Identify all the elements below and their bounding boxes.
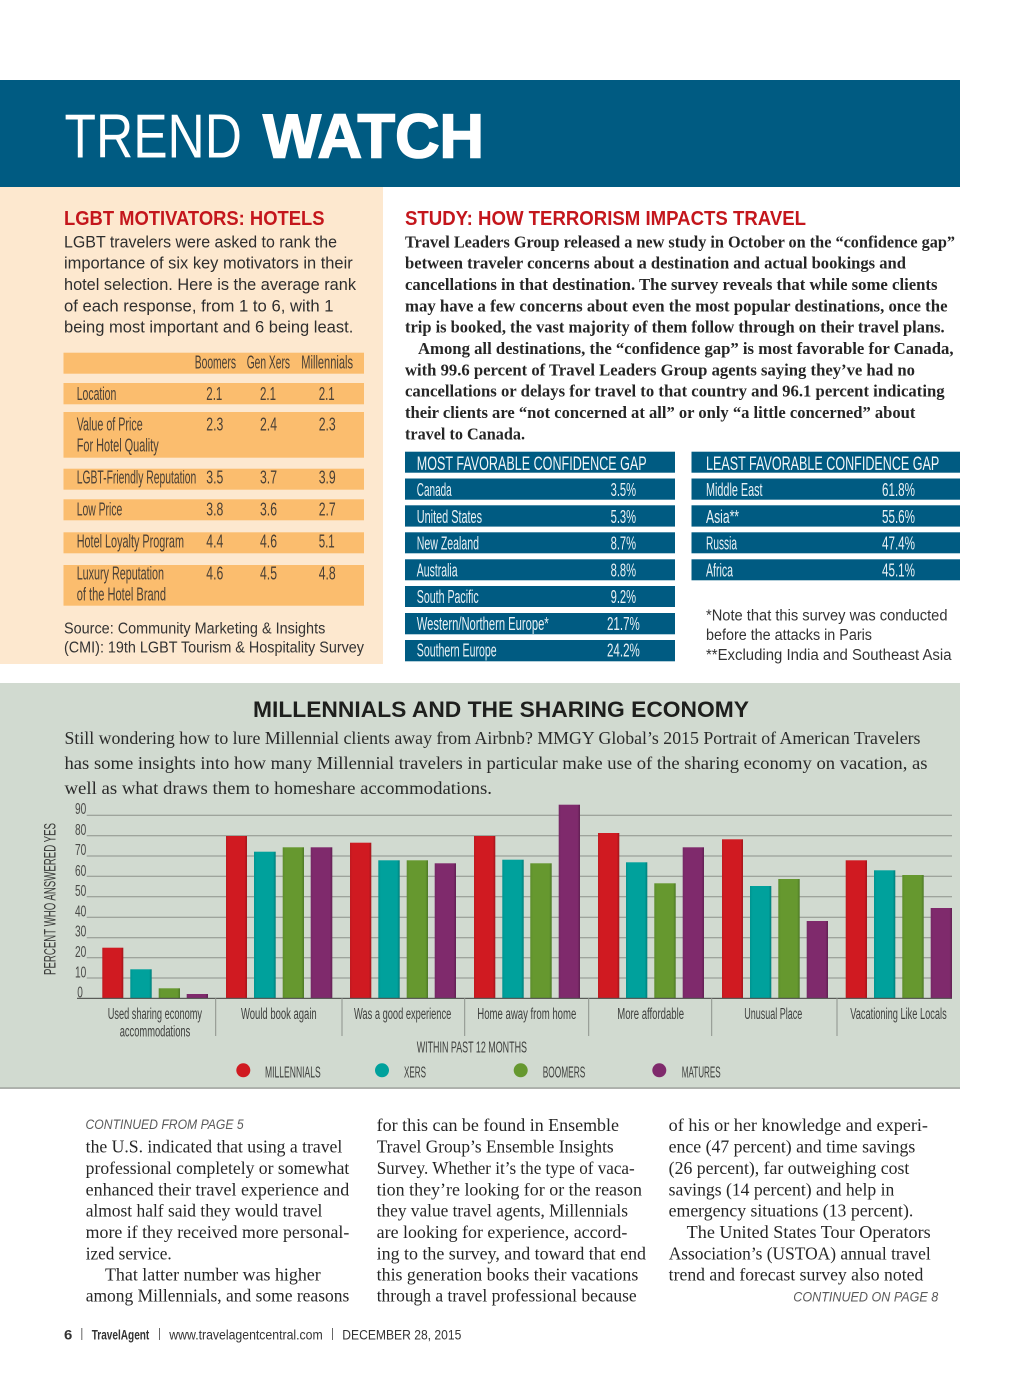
legend: XERS xyxy=(404,1064,426,1081)
y axis labels: 30 xyxy=(75,924,86,941)
row: South Pacific: 9.2% xyxy=(611,587,636,607)
row: Middle East xyxy=(692,478,960,500)
footnotes xyxy=(706,608,952,664)
row: Location: 2.1 xyxy=(206,384,222,404)
row: LGBT-Friendly Reputation: 3.9 xyxy=(319,467,336,487)
panel: terrorism study xyxy=(405,207,960,664)
article column 1: professional completely or somewhat xyxy=(86,1158,349,1178)
intro text: Millennials: has some insights into how many Millennial travelers in particular make use of the sharing economy on vacation, as xyxy=(64,753,928,773)
article column 3: Association’s (USTOA) annual travel xyxy=(669,1243,931,1263)
heading: Millennials: MILLENNIALS AND THE SHARING ECONOMY xyxy=(253,697,749,722)
table title: most favorable: MOST FAVORABLE CONFIDENCE GAP xyxy=(417,453,647,475)
article column 2: tion they’re looking for or the reason xyxy=(377,1179,642,1199)
table header row: Millennials xyxy=(301,352,353,372)
x axis caption: WITHIN PAST 12 MONTHS xyxy=(417,1040,527,1057)
row: Canada: 3.5% xyxy=(611,480,636,500)
row: Russia: Russia xyxy=(706,534,738,554)
continued on note: CONTINUED ON PAGE 8 xyxy=(793,1290,939,1305)
y axis title: PERCENT WHO ANSWERED YES xyxy=(40,823,60,975)
row: Hotel Loyalty Program: 5.1 xyxy=(319,531,335,551)
row: Luxury Reputation: 4.8 xyxy=(319,563,336,583)
x axis labels: Home away from home xyxy=(477,1006,576,1023)
body text: terrorism study: cancellations in that destination. The survey reveals that while some clients xyxy=(405,275,938,294)
row: Africa xyxy=(692,559,960,580)
table: least favorable confidence gap xyxy=(692,452,960,580)
row: Value of Price: Value of Price xyxy=(77,415,143,435)
row: LGBT-Friendly Reputation xyxy=(64,467,364,490)
page footer: www.travelagentcentral.com xyxy=(168,1327,323,1342)
title: TREND: TREND xyxy=(64,102,242,172)
y axis labels: 20 xyxy=(75,944,86,961)
row: Luxury Reputation xyxy=(64,563,364,606)
row: South Pacific xyxy=(405,586,675,607)
footnotes: before the attacks in Paris xyxy=(706,627,872,644)
article column 2 xyxy=(377,1115,646,1306)
article column 1: more if they received more personal- xyxy=(86,1222,349,1242)
source note: (CMI): 19th LGBT Tourism & Hospitality Survey xyxy=(64,640,364,657)
row: Low Price: Low Price xyxy=(77,499,122,519)
row: South Pacific: South Pacific xyxy=(417,587,479,607)
article column 3: of his or her knowledge and experi- xyxy=(669,1115,928,1135)
intro text: LGBT motivators xyxy=(64,232,356,337)
row: Africa: 45.1% xyxy=(882,560,915,580)
article column 1: That latter number was higher xyxy=(105,1264,321,1284)
article column 2: are looking for experience, accord- xyxy=(377,1222,627,1242)
intro text: LGBT motivators: importance of six key motivators in their xyxy=(64,254,353,273)
page footer xyxy=(64,1327,461,1342)
article column 1 xyxy=(86,1117,350,1306)
legend: MILLENNIALS xyxy=(265,1064,321,1081)
row: New Zealand: 8.7% xyxy=(611,534,636,554)
row: Hotel Loyalty Program: Hotel Loyalty Program xyxy=(77,531,184,551)
row: Asia: Asia** xyxy=(706,507,739,527)
row: Australia: 8.8% xyxy=(611,560,636,580)
body text: terrorism study: may have a few concerns about even the most popular destinations, once the xyxy=(405,296,948,315)
bars: used sharing economy xyxy=(102,948,208,998)
intro text: Millennials: Still wondering how to lure Millennial clients away from Airbnb? MMGY Global’s 2015 Portrait of American Travelers xyxy=(64,728,920,748)
body text: terrorism study: between traveler concerns about a destination and actual bookings and xyxy=(405,254,906,273)
row: Value of Price xyxy=(64,412,364,458)
x axis labels: accommodations xyxy=(120,1024,190,1041)
article column 2: ing to the survey, and toward that end xyxy=(377,1243,646,1263)
row: United States: 5.3% xyxy=(611,507,636,527)
source note xyxy=(64,620,364,657)
row: LGBT-Friendly Reputation: 3.7 xyxy=(260,467,277,487)
legend xyxy=(236,1063,721,1081)
heading: terrorism study: STUDY: HOW TERRORISM IMPACTS TRAVEL xyxy=(405,207,806,230)
x axis labels: Was a good experience xyxy=(354,1006,451,1023)
legend: MATURES xyxy=(682,1064,721,1081)
article column 1: ized service. xyxy=(86,1243,172,1263)
y axis labels: 10 xyxy=(75,964,86,981)
row: Value of Price: For Hotel Quality xyxy=(77,436,159,456)
article column 3: emergency situations (13 percent). xyxy=(669,1201,913,1221)
table header row: Boomers xyxy=(195,352,236,372)
row: Luxury Reputation: Luxury Reputation xyxy=(77,563,164,583)
x axis labels: Used sharing economy xyxy=(108,1006,202,1023)
row: Canada xyxy=(405,478,675,500)
intro text: LGBT motivators: LGBT travelers were asked to rank the xyxy=(64,232,337,251)
page footer: TravelAgent xyxy=(92,1327,150,1342)
body text: terrorism study: their clients are “not concerned at all” or only “a little concerned” about xyxy=(405,403,916,422)
article column 1: among Millennials, and some reasons xyxy=(86,1286,349,1306)
row: Luxury Reputation: 4.5 xyxy=(260,563,277,583)
row: Russia xyxy=(692,532,960,554)
continued from note: CONTINUED FROM PAGE 5 xyxy=(86,1117,244,1132)
row: New Zealand: New Zealand xyxy=(417,534,479,554)
article column 2: through a travel professional because xyxy=(377,1286,637,1306)
article column 3: savings (14 percent) and help in xyxy=(669,1179,895,1199)
row: Location xyxy=(64,383,364,404)
row: LGBT-Friendly Reputation: 3.5 xyxy=(206,467,223,487)
row: Russia: 47.4% xyxy=(882,534,915,554)
body text: terrorism study: Travel Leaders Group released a new study in October on the “confidence gap” xyxy=(405,232,955,251)
footnotes: **Excluding India and Southeast Asia xyxy=(706,647,952,664)
row: Asia xyxy=(692,505,960,527)
row: Middle East: Middle East xyxy=(706,480,762,500)
row: Low Price: 3.6 xyxy=(260,499,277,519)
row: Hotel Loyalty Program: 4.4 xyxy=(206,531,223,551)
y axis labels: 40 xyxy=(75,904,86,921)
intro text: LGBT motivators: being most important and 6 being least. xyxy=(64,318,353,337)
bars: home away from home xyxy=(474,805,580,998)
row: Southern Europe: 24.2% xyxy=(607,641,640,661)
row: Luxury Reputation: 4.6 xyxy=(206,563,223,583)
row: Value of Price: 2.3 xyxy=(319,415,336,435)
source note: Source: Community Marketing & Insights xyxy=(64,620,326,637)
header banner: Trend Watch xyxy=(0,80,960,187)
body text: terrorism study: Among all destinations, the “confidence gap” is most favorable for Canada, xyxy=(418,339,954,358)
body text: terrorism study xyxy=(405,232,955,443)
row: Africa: Africa xyxy=(706,560,734,580)
x axis labels: More affordable xyxy=(617,1006,684,1023)
y axis labels: 70 xyxy=(75,842,86,859)
article column 1: the U.S. indicated that using a travel xyxy=(86,1137,342,1157)
article column 3 xyxy=(669,1115,939,1305)
row: Western/Northern Europe: 21.7% xyxy=(607,614,640,634)
bars: was a good experience xyxy=(350,843,456,998)
table: motivator rankings xyxy=(64,352,364,606)
row: Australia xyxy=(405,559,675,580)
row: Low Price: 3.8 xyxy=(206,499,223,519)
row: Hotel Loyalty Program: 4.6 xyxy=(260,531,277,551)
bars: more affordable xyxy=(598,833,704,998)
row: Hotel Loyalty Program xyxy=(64,531,364,553)
body text: terrorism study: with 99.6 percent of Travel Leaders Group agents saying they’ve had no xyxy=(405,360,915,379)
row: Value of Price: 2.4 xyxy=(260,415,277,435)
row: Australia: Australia xyxy=(417,560,458,580)
intro text: LGBT motivators: of each response, from 1 to 6, with 1 xyxy=(64,296,334,316)
row: Location: 2.1 xyxy=(319,384,335,404)
page footer: 6 xyxy=(64,1327,73,1342)
legend: BOOMERS xyxy=(543,1064,585,1081)
panel: Millennials and the sharing economy xyxy=(0,683,960,1089)
row: Middle East: 61.8% xyxy=(882,480,915,500)
body text: terrorism study: travel to Canada. xyxy=(405,424,525,443)
x axis labels: Vacationing Like Locals xyxy=(850,1006,947,1023)
article column 3: The United States Tour Operators xyxy=(687,1222,931,1242)
title: WATCH: WATCH xyxy=(263,102,484,172)
row: United States xyxy=(405,505,675,527)
article column 2: they value travel agents, Millennials xyxy=(377,1201,628,1221)
bars: vacationing like locals xyxy=(846,860,952,998)
intro text: Millennials: well as what draws them to homeshare accommodations. xyxy=(64,778,492,798)
footnotes: *Note that this survey was conducted xyxy=(706,608,948,625)
y axis labels: 0 xyxy=(77,985,83,1002)
row: Location: 2.1 xyxy=(260,384,276,404)
body text: terrorism study: cancellations or delays for travel to that country and 96.1 percent indicating xyxy=(405,382,945,401)
x axis labels: Unusual Place xyxy=(744,1006,802,1023)
x axis labels xyxy=(108,1006,947,1041)
article column 2: Travel Group’s Ensemble Insights xyxy=(377,1137,614,1157)
page footer: DECEMBER 28, 2015 xyxy=(342,1327,461,1342)
article column 2: Survey. Whether it’s the type of vaca- xyxy=(377,1158,635,1178)
table: most favorable confidence gap xyxy=(405,452,675,661)
heading: LGBT motivators: LGBT MOTIVATORS: HOTELS xyxy=(64,207,324,230)
y axis labels: 90 xyxy=(75,801,86,818)
intro text: LGBT motivators: hotel selection. Here is the average rank xyxy=(64,275,356,294)
row: Southern Europe: Southern Europe xyxy=(417,641,497,661)
article column 1: enhanced their travel experience and xyxy=(86,1179,350,1199)
table header row: Gen Xers xyxy=(247,352,290,372)
article column 1: almost half said they would travel xyxy=(86,1201,322,1221)
row: LGBT-Friendly Reputation: LGBT-Friendly Reputation xyxy=(77,467,196,487)
y axis labels xyxy=(75,801,86,1002)
row: Asia: 55.6% xyxy=(882,507,915,527)
row: Location: Location xyxy=(77,384,116,404)
row: Luxury Reputation: of the Hotel Brand xyxy=(77,585,166,605)
body text: terrorism study: trip is booked, the vast majority of them follow through on their travel plans. xyxy=(405,318,945,337)
bar chart xyxy=(40,801,952,1081)
table header row xyxy=(64,352,364,374)
bars: unusual place xyxy=(722,839,828,998)
row: Western/Northern Europe: Western/Northern Europe* xyxy=(417,614,549,634)
article column 3: (26 percent), far outweighing cost xyxy=(669,1158,909,1178)
row: Value of Price: 2.3 xyxy=(206,415,223,435)
article column 3: trend and forecast survey also noted xyxy=(669,1264,924,1284)
y axis labels: 50 xyxy=(75,883,86,900)
row: Southern Europe xyxy=(405,640,675,661)
table title: most favorable xyxy=(405,452,675,475)
article column 2: for this can be found in Ensemble xyxy=(377,1115,619,1135)
row: New Zealand xyxy=(405,532,675,554)
row: United States: United States xyxy=(417,507,482,527)
article column 2: this generation books their vacations xyxy=(377,1264,638,1284)
row: Low Price: 2.7 xyxy=(319,499,336,519)
row: Canada: Canada xyxy=(417,480,452,500)
panel: LGBT motivators xyxy=(0,187,383,664)
x axis labels: Would book again xyxy=(241,1006,317,1023)
y axis labels: 60 xyxy=(75,863,86,880)
intro text: Millennials xyxy=(64,728,928,798)
bars: would book again xyxy=(226,836,332,998)
article column 3: ence (47 percent) and time savings xyxy=(669,1137,915,1157)
y axis labels: 80 xyxy=(75,822,86,839)
row: Low Price xyxy=(64,499,364,520)
